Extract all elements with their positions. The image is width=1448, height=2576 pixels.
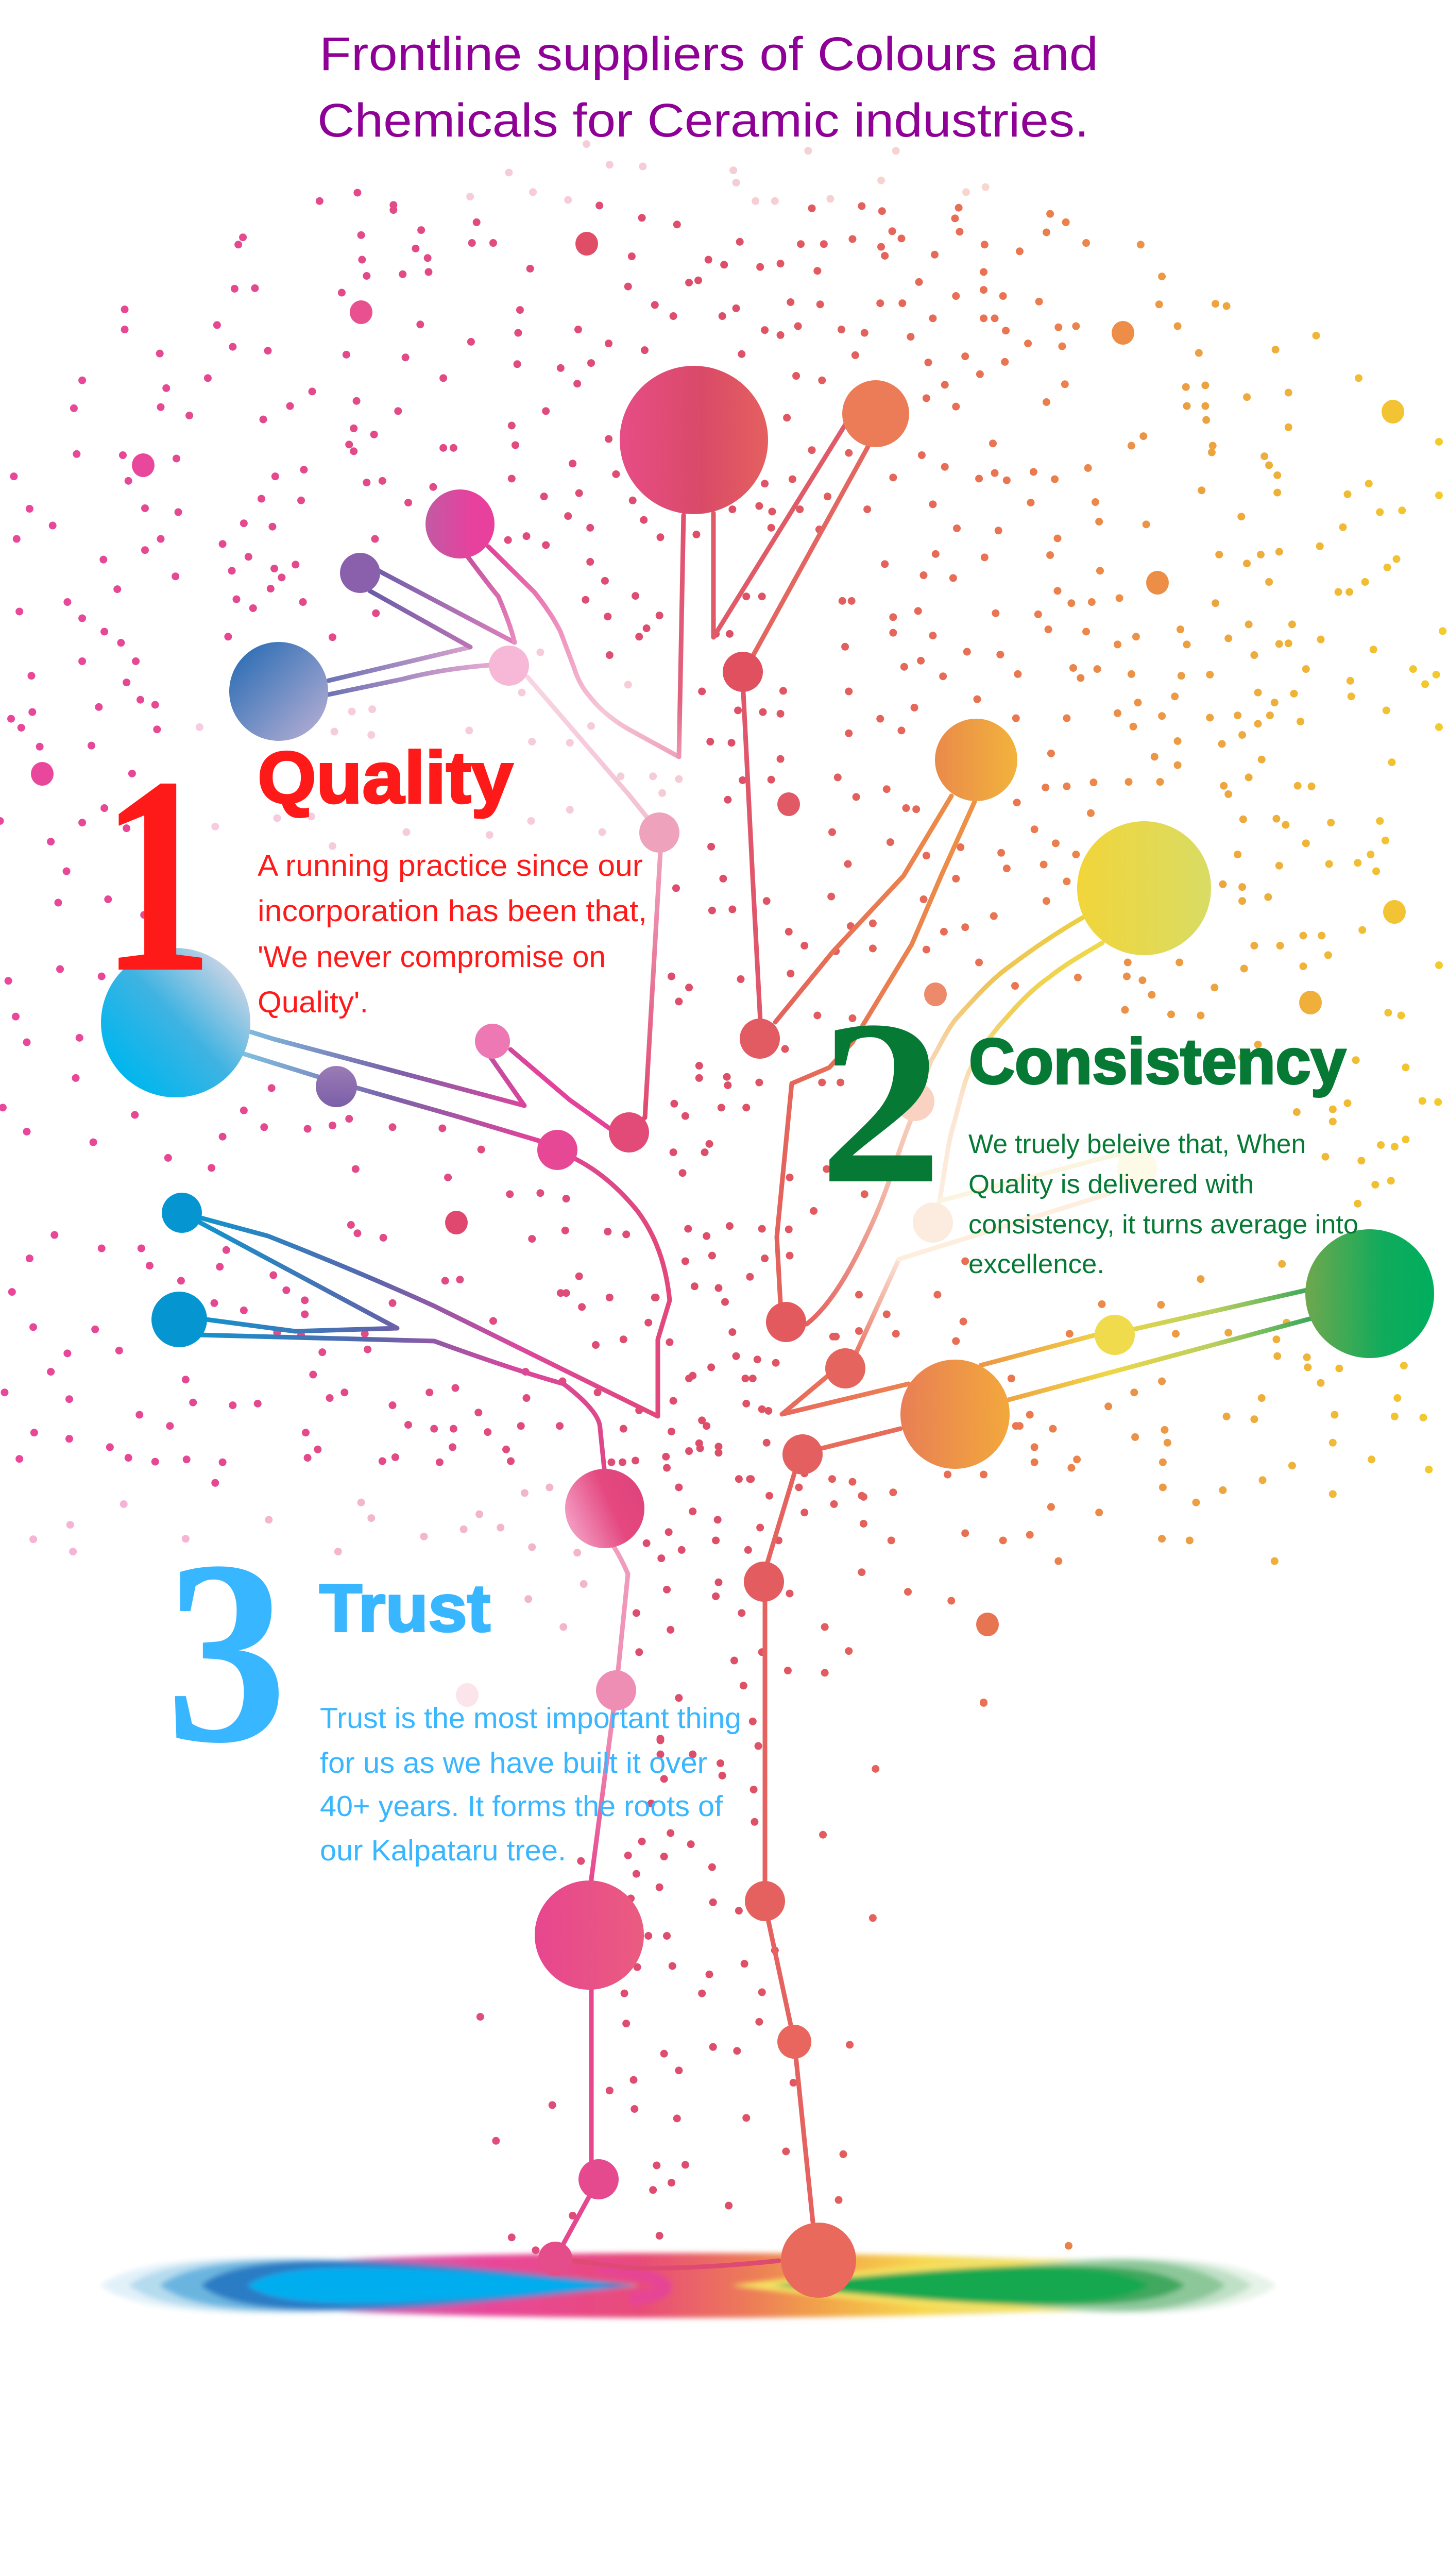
section 1: Quality: [100, 719, 647, 1031]
section 1: Quality: Quality: [258, 737, 513, 819]
section 2: Consistency: Consistency: [969, 1026, 1346, 1097]
section 1: Quality: 'We never compromise on: [258, 940, 606, 974]
section 3: Trust: 40+ years. It forms the roots of: [320, 1790, 723, 1823]
tree nodes: [101, 366, 1434, 2298]
section 3: Trust: for us as we have built it over: [320, 1747, 707, 1780]
section 1: Quality: A running practice since our: [258, 849, 643, 883]
title: [317, 28, 1098, 147]
faded dots: top and behind Quality text: [199, 144, 985, 846]
faded dots: lower left: [33, 1487, 584, 1627]
section 2: Consistency: We truely beleive that, When: [968, 1129, 1306, 1159]
shadow: rainbow pool under the tree: [101, 2253, 1276, 2318]
section 3: Trust: Trust is the most important thing: [320, 1702, 741, 1735]
scattered dots: upper crown: [0, 193, 1443, 871]
section 2: Consistency: 2: [819, 972, 943, 1232]
section 2: Consistency: Quality is delivered with: [968, 1170, 1254, 1199]
section 1: Quality: incorporation has been that,: [258, 894, 647, 928]
section 3: Trust: our Kalpataru tree.: [320, 1834, 566, 1867]
section 2: Consistency: [819, 972, 1358, 1279]
section 1: Quality: 1: [100, 719, 214, 1031]
section 2: Consistency: consistency, it turns average into: [968, 1210, 1358, 1240]
scattered dots: lower trunk: [480, 1703, 1069, 2250]
section 2: Consistency: excellence.: [968, 1249, 1104, 1279]
title: Frontline suppliers of Colours and: [319, 28, 1098, 80]
branches of the tree: [179, 425, 1311, 2268]
scattered dots: middle canopy: [3, 878, 1439, 1739]
section 3: Trust: Trust: [319, 1570, 490, 1646]
free floating circles: [31, 232, 1406, 1707]
title: Chemicals for Ceramic industries.: [317, 94, 1089, 147]
section 3: Trust: 3: [166, 1507, 287, 1798]
section 3: Trust: [166, 1507, 741, 1867]
section 1: Quality: Quality'.: [258, 986, 368, 1019]
